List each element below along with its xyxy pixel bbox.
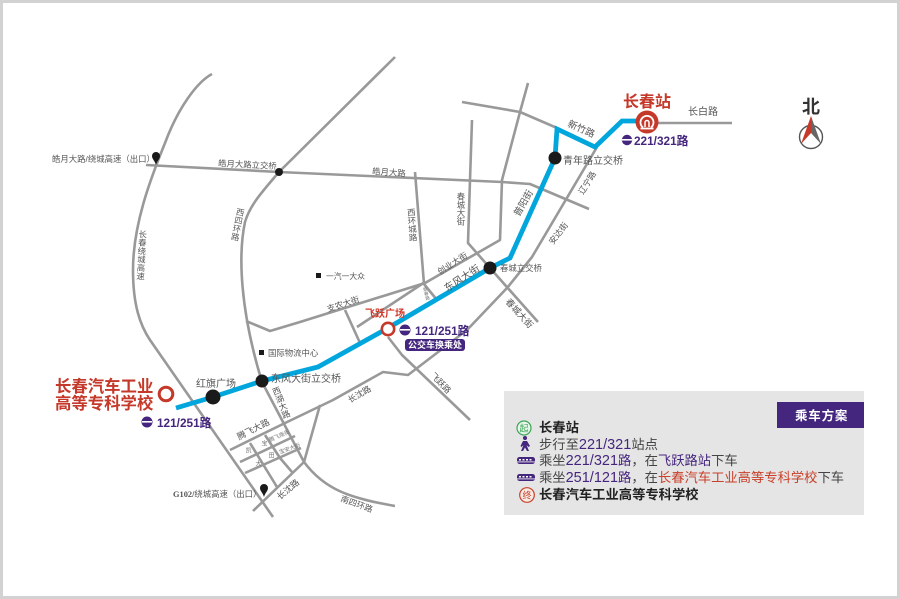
road labels: 一汽一大众 (326, 271, 365, 281)
step 5: end: 终 (522, 490, 532, 500)
route stops (206, 152, 562, 404)
panel: travel plan legend (504, 391, 864, 515)
start station: 长春站: 长春站 (623, 92, 671, 111)
road labels: 长白路 (688, 105, 718, 118)
road network (133, 57, 732, 517)
transfer point: 飞跃广场: 121/251路 (415, 324, 470, 338)
road labels: 田 (267, 452, 274, 459)
road labels: 腾飞南街 (268, 427, 291, 444)
step 4: bus 251/121: 乘坐251/121路，在长春汽车工业高等专科学校下车 (539, 469, 844, 486)
road labels: 西四环路 (230, 207, 246, 242)
transfer point: 飞跃广场: 公交车换乘处 (408, 339, 462, 350)
transfer point: 飞跃广场: 飞跃广场 (365, 307, 405, 320)
start station: 长春站: 221/321路 (634, 134, 689, 148)
road labels: 支农大街 (326, 294, 361, 314)
step 1: start: 长春站 (539, 419, 579, 435)
step 1: start: 起 (520, 424, 529, 434)
start station: 长春站 (622, 92, 689, 148)
road labels: 腾飞大路 (235, 416, 271, 442)
destination: college: 长春汽车工业 (55, 377, 153, 396)
road labels: 辽宁路 (576, 169, 598, 196)
road labels: 景春路 (422, 286, 431, 302)
road labels: 春城大街 (504, 296, 536, 330)
road labels: 西湖大路 (270, 385, 292, 420)
road labels: 红旗广场 (196, 377, 236, 390)
road labels: 国际物流中心 (268, 348, 319, 358)
step 5: end: 长春汽车工业高等专科学校 (539, 486, 699, 502)
road labels: G102/绕城高速（出口） (173, 489, 261, 499)
road labels: 长沈路 (346, 383, 373, 405)
bus label: 121/251 college: 121/251路 (157, 416, 212, 430)
step 3: bus 221/321: 乘坐221/321路，在飞跃路站下车 (539, 452, 738, 469)
road labels: 长春绕城高速 (135, 229, 148, 282)
road labels: 春城立交桥 (500, 263, 542, 273)
road labels: 皓月大路/绕城高速（出口） (52, 154, 155, 164)
road labels: 飞跃路 (429, 370, 454, 396)
road labels: 长沈路 (274, 476, 301, 502)
road labels: 春城大街 (456, 191, 466, 227)
road labels: 西环城路 (406, 208, 418, 242)
road labels: 大 (254, 459, 261, 467)
destination: college (55, 377, 173, 413)
road labels: 创业大街 (436, 250, 470, 277)
transfer point: 飞跃广场 (365, 307, 470, 351)
compass: north arrow: 北 (802, 97, 820, 117)
road labels: 东风大街立交桥 (271, 372, 341, 385)
landmark squares (259, 273, 321, 355)
road labels: 安达街 (547, 220, 570, 246)
exit pin: G102 (260, 484, 268, 497)
road labels: 皓月大路 (372, 166, 407, 178)
bus route line (176, 121, 647, 408)
road labels: 宝安大街 (278, 441, 302, 456)
road labels (52, 105, 718, 515)
road labels: 宝 (260, 439, 267, 446)
destination: college: 高等专科学校 (55, 394, 154, 413)
legend header: 乘车方案 (795, 408, 848, 423)
road labels: 凯 (244, 446, 251, 454)
road labels: 东风大街 (442, 262, 482, 295)
compass: north arrow (800, 97, 822, 148)
road labels: 普阳街 (511, 187, 536, 219)
step 2: walk: 步行至221/321站点 (539, 437, 658, 453)
legend header (777, 402, 864, 428)
road labels: 青年路立交桥 (563, 154, 623, 167)
road labels: 新竹路 (566, 118, 597, 141)
step 1: start (517, 419, 579, 435)
road labels: 南四环路 (339, 493, 375, 515)
road labels: 皓月大路立交桥 (218, 158, 278, 171)
exit pin: 皓月大路 (152, 152, 160, 165)
